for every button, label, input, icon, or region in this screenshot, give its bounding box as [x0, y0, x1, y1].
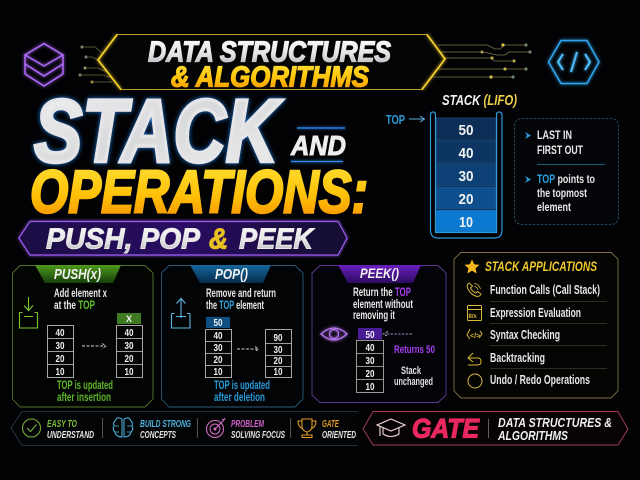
peek description: Return the TOP	[353, 287, 411, 299]
item: backtracking	[468, 351, 545, 365]
peek description	[353, 287, 413, 322]
title banner: DATA STRUCTURES	[148, 36, 392, 68]
stack values: 30	[458, 168, 474, 185]
gate subtitle: DATA STRUCTURES &	[498, 415, 612, 430]
benefit: build strong concepts	[113, 418, 191, 441]
benefit: problem solving focus: SOLVING FOCUS	[231, 430, 285, 441]
stack values: 10	[459, 214, 473, 231]
headline: STACK: STACK	[34, 80, 283, 180]
stack after push	[116, 313, 142, 378]
gate subtitle	[497, 415, 612, 443]
LIFO note box: the topmost	[537, 188, 587, 200]
peek result: unchanged	[394, 376, 433, 388]
panel: stack applications	[454, 252, 618, 398]
pop description: the TOP element	[206, 300, 264, 312]
stack before pop: 40	[214, 330, 223, 342]
icon: pop out of box	[172, 298, 190, 328]
pop description	[206, 288, 276, 312]
item: expression evaluation: Expression Evaluation	[490, 306, 581, 320]
stack for peek: 10	[366, 381, 375, 393]
panel: push	[12, 265, 153, 407]
push description	[54, 288, 107, 312]
icon: star	[464, 260, 480, 274]
panel: peek	[312, 265, 446, 402]
peek description: removing it	[353, 310, 395, 322]
stack before pop: 30	[214, 342, 223, 354]
stack after pop: 20	[274, 355, 283, 367]
benefit: gate oriented: ORIENTED	[322, 430, 356, 441]
push tab: PUSH(x)	[54, 266, 101, 283]
arrow: pop result	[237, 346, 258, 352]
benefit: gate oriented	[298, 419, 356, 441]
stack after push: 30	[124, 340, 134, 352]
subtitle banner: &	[209, 224, 228, 256]
pop tab	[190, 265, 271, 283]
gate wordmark: GATE	[412, 414, 480, 444]
title banner	[98, 34, 445, 94]
subtitle banner: PEEK	[239, 224, 315, 256]
stack before pop	[206, 317, 232, 378]
LIFO note box: TOP points to	[537, 174, 595, 186]
pop note	[214, 380, 270, 404]
gate banner	[363, 412, 628, 445]
icon: push into box	[20, 297, 38, 328]
stack tube	[430, 112, 502, 238]
stack after pop: 90	[274, 332, 283, 344]
stack before pop: 50	[214, 317, 223, 329]
item: undo redo: Undo / Redo Operations	[490, 373, 590, 387]
push note	[57, 380, 113, 404]
item: backtracking: Backtracking	[490, 351, 545, 365]
benefit: easy to understand	[22, 419, 94, 441]
headline: AND: AND	[290, 130, 346, 161]
stack before pop: 10	[214, 366, 223, 378]
stack after push: 20	[124, 353, 134, 365]
stack after pop	[266, 330, 292, 378]
item: expression evaluation	[468, 306, 581, 320]
subtitle banner	[19, 222, 347, 256]
push description: at the TOP	[54, 300, 95, 312]
title banner: & ALGORITHMS	[171, 62, 370, 94]
peek result: Returns 50	[394, 344, 435, 356]
stack values: 50	[458, 122, 474, 139]
LIFO note box	[514, 118, 618, 224]
subtitle banner: PUSH, POP	[46, 224, 201, 256]
stack cells	[436, 118, 497, 232]
arrow: push result	[82, 344, 106, 348]
LIFO note box: element	[537, 202, 571, 214]
headline: OPERATIONS: OPERATIONS:	[30, 158, 368, 226]
benefit: problem solving focus: PROBLEM	[231, 419, 264, 430]
stack for peek	[356, 328, 384, 393]
icon: layered stack	[25, 44, 63, 86]
pop note: after deletion	[214, 392, 265, 404]
stack before push: 10	[56, 366, 65, 378]
stack before push: 30	[56, 340, 65, 352]
top label and arrow	[386, 112, 424, 127]
stack after push: X	[126, 314, 132, 324]
stack after push: 40	[124, 327, 134, 339]
circuit lines right	[427, 44, 531, 78]
benefit: easy to understand: EASY TO	[47, 419, 77, 430]
benefit: build strong concepts: CONCEPTS	[140, 430, 176, 441]
stack after pop: 30	[274, 344, 283, 356]
icon: code hexagon	[548, 40, 599, 84]
peek result: Stack	[401, 365, 422, 377]
stack after push: 10	[124, 366, 134, 378]
benefit: gate oriented: GATE	[322, 419, 339, 430]
stack LIFO diagram	[386, 92, 517, 238]
item: expression evaluation: 8/x	[468, 314, 478, 320]
push tab	[35, 265, 121, 283]
stack before push: 20	[56, 353, 65, 365]
peek tab: PEEK()	[360, 265, 399, 281]
icon: graduation cap	[377, 419, 405, 436]
benefit: build strong concepts: BUILD STRONG	[140, 419, 191, 430]
item: syntax checking: </>	[470, 333, 480, 340]
stack before push	[48, 326, 74, 378]
peek description: element without	[353, 299, 413, 311]
stack for peek: 30	[366, 355, 375, 367]
applications heading: STACK APPLICATIONS	[485, 258, 597, 274]
panel: pop	[162, 265, 303, 407]
stack after pop: 10	[274, 366, 283, 378]
icon: eye	[321, 328, 347, 340]
stack values: 20	[458, 191, 474, 208]
stack for peek: 50	[366, 329, 375, 341]
push note: after insertion	[57, 392, 111, 404]
stack values	[458, 122, 474, 231]
stack heading: STACK (LIFO)	[442, 92, 517, 109]
stack for peek: 40	[366, 342, 375, 354]
circuit lines left	[79, 46, 114, 83]
item: function calls	[467, 283, 600, 297]
item: syntax checking	[467, 328, 560, 342]
top label and arrow: TOP	[386, 112, 405, 127]
benefit: problem solving focus	[206, 418, 285, 441]
benefit: easy to understand: UNDERSTAND	[47, 430, 94, 441]
pop note: TOP is updated	[214, 380, 270, 392]
stack before pop: 20	[214, 354, 223, 366]
stack for peek: 20	[366, 368, 375, 380]
benefits strip	[11, 412, 358, 446]
peek result	[394, 344, 435, 388]
item: syntax checking: Syntax Checking	[490, 328, 560, 342]
LIFO note box: FIRST OUT	[537, 145, 583, 157]
LIFO note box: LAST IN	[537, 130, 572, 142]
gate subtitle: ALGORITHMS	[497, 428, 568, 443]
arrow: peek return	[383, 332, 412, 336]
push description: Add element x	[54, 288, 107, 300]
pop tab: POP()	[215, 266, 248, 283]
push note: TOP is updated	[57, 380, 113, 392]
pop description: Remove and return	[206, 288, 276, 300]
stack values: 40	[458, 145, 474, 162]
item: undo redo	[468, 373, 590, 388]
stack before push: 40	[56, 327, 65, 339]
